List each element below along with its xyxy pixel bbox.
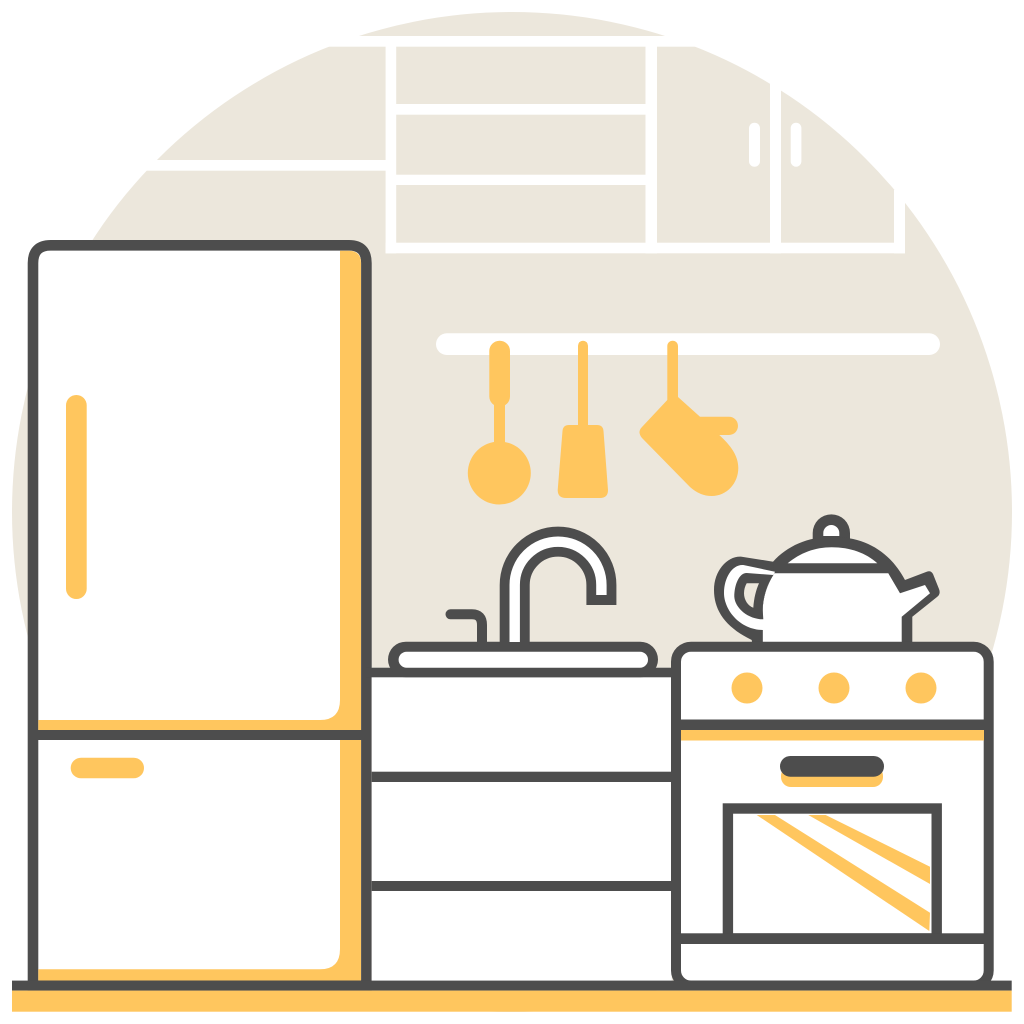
- kettle knob: [813, 514, 850, 545]
- fridge yellow shading, upper door: [38, 251, 361, 730]
- upper wall cabinets: [100, 36, 905, 253]
- stove body: [676, 647, 989, 986]
- kettle handle: [714, 557, 775, 642]
- fridge yellow shading, lower door: [38, 740, 361, 980]
- stove divider: [676, 720, 988, 730]
- sink: [388, 642, 658, 677]
- small tap lever: [450, 614, 482, 645]
- hanging utensils: [468, 341, 738, 504]
- stove: [676, 647, 989, 986]
- icon: spatula: [558, 341, 608, 498]
- utensil rail: [436, 333, 940, 355]
- fridge upper handle: [66, 395, 87, 599]
- fridge body: [33, 245, 366, 986]
- cabinet door handles: [749, 123, 801, 167]
- oven handle: [780, 756, 884, 787]
- oven window: [728, 808, 937, 938]
- icon: oven mitt: [640, 341, 738, 496]
- fridge lower handle: [71, 758, 144, 778]
- stove yellow strip: [681, 730, 984, 740]
- fridge divider: [33, 730, 366, 740]
- base cabinets: [366, 668, 672, 982]
- stove knobs: [732, 672, 936, 704]
- kettle lid: [788, 547, 877, 563]
- kettle silhouette with spout: [752, 537, 940, 642]
- refrigerator: [33, 245, 366, 986]
- faucet: [450, 542, 601, 645]
- kettle: [714, 514, 940, 642]
- window light reflections: [757, 815, 930, 931]
- floor: [12, 981, 1012, 1012]
- icon: ladle: [468, 341, 531, 504]
- oven lower divider: [676, 933, 988, 944]
- kettle body: [763, 573, 930, 642]
